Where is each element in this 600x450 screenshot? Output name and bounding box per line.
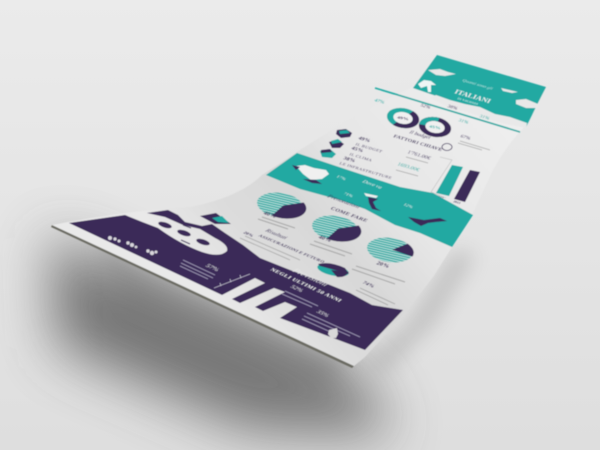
budget figures: 1693.00€ bbox=[396, 162, 421, 173]
stat row: 31% bbox=[478, 114, 491, 122]
donut chart 1 bbox=[388, 107, 418, 129]
header subtitle: Quanti sono gli bbox=[461, 78, 495, 91]
stat: 57 percent bbox=[180, 260, 221, 279]
label: 40 percent first: 40% bbox=[262, 211, 277, 219]
icon: plane bbox=[501, 88, 518, 93]
pie chart: 40 percent second bbox=[310, 213, 363, 244]
small stat: 20 percent bbox=[240, 231, 300, 260]
icon: map and plane bbox=[296, 165, 329, 180]
boat labels bbox=[181, 225, 198, 252]
bar chart bbox=[436, 165, 480, 205]
panel: top teal header bbox=[375, 55, 546, 132]
stat: 57 percent: 57% bbox=[203, 263, 221, 273]
small stat: 20 percent: 20% bbox=[242, 231, 255, 238]
stat: 35 percent bbox=[302, 309, 360, 337]
donut chart 1: 49% bbox=[397, 116, 409, 122]
list of key factors bbox=[339, 136, 393, 180]
label: 20 percent: 20% bbox=[375, 261, 390, 269]
stat: 17 percent: 17% bbox=[335, 175, 347, 181]
stat row: 47% bbox=[373, 98, 386, 106]
paper shadow bbox=[50, 235, 475, 435]
heading: negli ultimi 50 anni: NEGLI ULTIMI 50 ANNI bbox=[269, 268, 343, 304]
budget figures bbox=[396, 150, 452, 198]
thin teal rule bbox=[375, 88, 520, 132]
stat row: 38% bbox=[446, 104, 459, 112]
boat icon bbox=[200, 213, 231, 224]
stat: 52 percent bbox=[282, 284, 318, 307]
list of key factors: 45% bbox=[350, 146, 364, 154]
icon: world map silhouette bbox=[408, 217, 447, 226]
panel: teal destination band bbox=[266, 153, 473, 247]
icon: palm trees bbox=[418, 80, 436, 92]
icon: italy map bbox=[368, 197, 381, 211]
donut chart 2: 45% bbox=[429, 125, 441, 131]
stat: 35 percent: 35% bbox=[314, 309, 331, 318]
captions under pies bbox=[258, 217, 405, 284]
heading: fattori chiave: Il budget bbox=[407, 130, 432, 141]
boat portholes bbox=[158, 220, 210, 247]
donut chart 2 bbox=[420, 116, 450, 138]
header title: ITALIANI bbox=[453, 88, 493, 105]
header caption: in vacanza bbox=[456, 96, 479, 106]
heading: dove va: Dove va bbox=[360, 179, 383, 190]
stat row bbox=[373, 98, 491, 126]
pie chart: 20 percent bbox=[365, 235, 415, 265]
label: 40 percent second: 40% bbox=[317, 235, 332, 243]
list of key factors: IL BUDGET bbox=[355, 142, 384, 153]
qr code bbox=[328, 328, 338, 338]
icon: clouds bbox=[428, 69, 538, 108]
stat: 71 percent: 71% bbox=[342, 192, 354, 198]
axis line bbox=[214, 274, 250, 288]
stat: 12 percent: 12% bbox=[402, 203, 414, 209]
icons: factor blobs bbox=[320, 129, 352, 158]
budget figures: 1'761.00€ bbox=[406, 150, 432, 161]
bar chart: 2012 bbox=[436, 195, 445, 200]
pie chart: 40 percent first bbox=[255, 190, 308, 221]
list of key factors: 49% bbox=[357, 136, 371, 144]
stat row: 52% bbox=[419, 103, 432, 111]
panel: bottom purple section bbox=[69, 210, 403, 350]
bar chart: 2013 bbox=[453, 200, 462, 205]
heading: assicurazioni e futuro: Risultati bbox=[263, 228, 288, 241]
list of key factors: 38% bbox=[342, 156, 356, 164]
heading: come fare: Prenotazioni bbox=[325, 194, 361, 210]
small donut chart bbox=[316, 261, 350, 279]
icon: piggy bank bbox=[442, 144, 452, 150]
decorative palms bbox=[108, 236, 158, 255]
stat: 67 percent: 67% bbox=[459, 134, 472, 142]
stat row: 31% bbox=[457, 118, 470, 126]
heading: come fare: COME FARE bbox=[329, 206, 369, 223]
heading: come fare bbox=[325, 194, 369, 223]
stat: 52 percent: 52% bbox=[288, 284, 305, 293]
list of key factors: LE INFRASTRUTTURE bbox=[339, 161, 393, 180]
paper sheet bbox=[51, 55, 546, 368]
stat: 74 percent: 74% bbox=[361, 281, 376, 289]
heading: previsioni: Previsioni bbox=[290, 267, 331, 288]
heading: fattori chiave: FATTORI CHIAVE bbox=[392, 134, 444, 153]
torn paper edge bbox=[430, 95, 527, 128]
stat: 67 percent bbox=[458, 134, 490, 150]
list of key factors: IL CLIMA bbox=[349, 152, 374, 162]
stat: 74 percent bbox=[356, 281, 395, 305]
heading: assicurazioni e futuro: ASSICURAZIONI E FUTURO bbox=[257, 234, 325, 264]
